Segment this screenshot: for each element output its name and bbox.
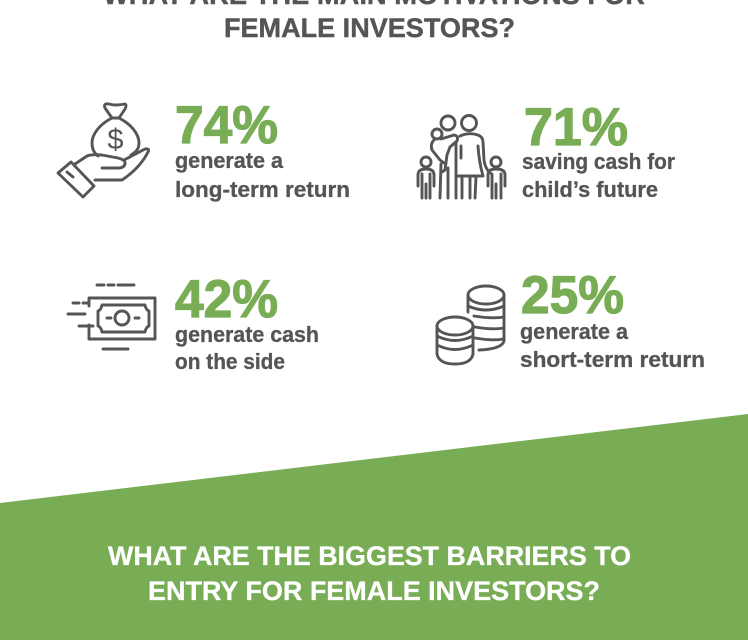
icon: flying banknote bbox=[68, 285, 155, 349]
panel: green barriers band bbox=[0, 414, 748, 640]
title: motivations bbox=[103, 0, 645, 43]
stat: 71% bbox=[522, 98, 675, 202]
stat: 25% bbox=[520, 266, 705, 372]
stat: 71%: child’s future bbox=[522, 177, 658, 202]
icon: money bag in hand: $ bbox=[107, 124, 124, 156]
icon: coin stacks bbox=[437, 286, 504, 364]
stat: 42%: generate cash bbox=[175, 322, 319, 347]
heading: barriers: WHAT ARE THE BIGGEST BARRIERS TO bbox=[108, 541, 631, 571]
stat: 42% bbox=[175, 270, 319, 374]
stat: 25%: short-term return bbox=[520, 347, 705, 372]
title: motivations: FEMALE INVESTORS? bbox=[224, 13, 515, 43]
heading: barriers bbox=[108, 541, 631, 606]
stat: 42%: 42% bbox=[175, 270, 278, 329]
stat: 74% bbox=[175, 96, 350, 202]
stat: 74%: generate a bbox=[175, 148, 284, 173]
stat: 71%: 71% bbox=[524, 98, 628, 157]
icon: money bag in hand bbox=[58, 104, 149, 197]
stat: 25%: 25% bbox=[521, 266, 624, 325]
stat: 74%: long-term return bbox=[175, 177, 350, 202]
stat: 71%: saving cash for bbox=[522, 149, 675, 174]
stat: 42%: on the side bbox=[175, 349, 285, 374]
stat: 74%: 74% bbox=[175, 96, 278, 155]
heading: barriers: ENTRY FOR FEMALE INVESTORS? bbox=[148, 576, 600, 606]
stat: 25%: generate a bbox=[520, 319, 629, 344]
icon: family bbox=[418, 116, 505, 198]
